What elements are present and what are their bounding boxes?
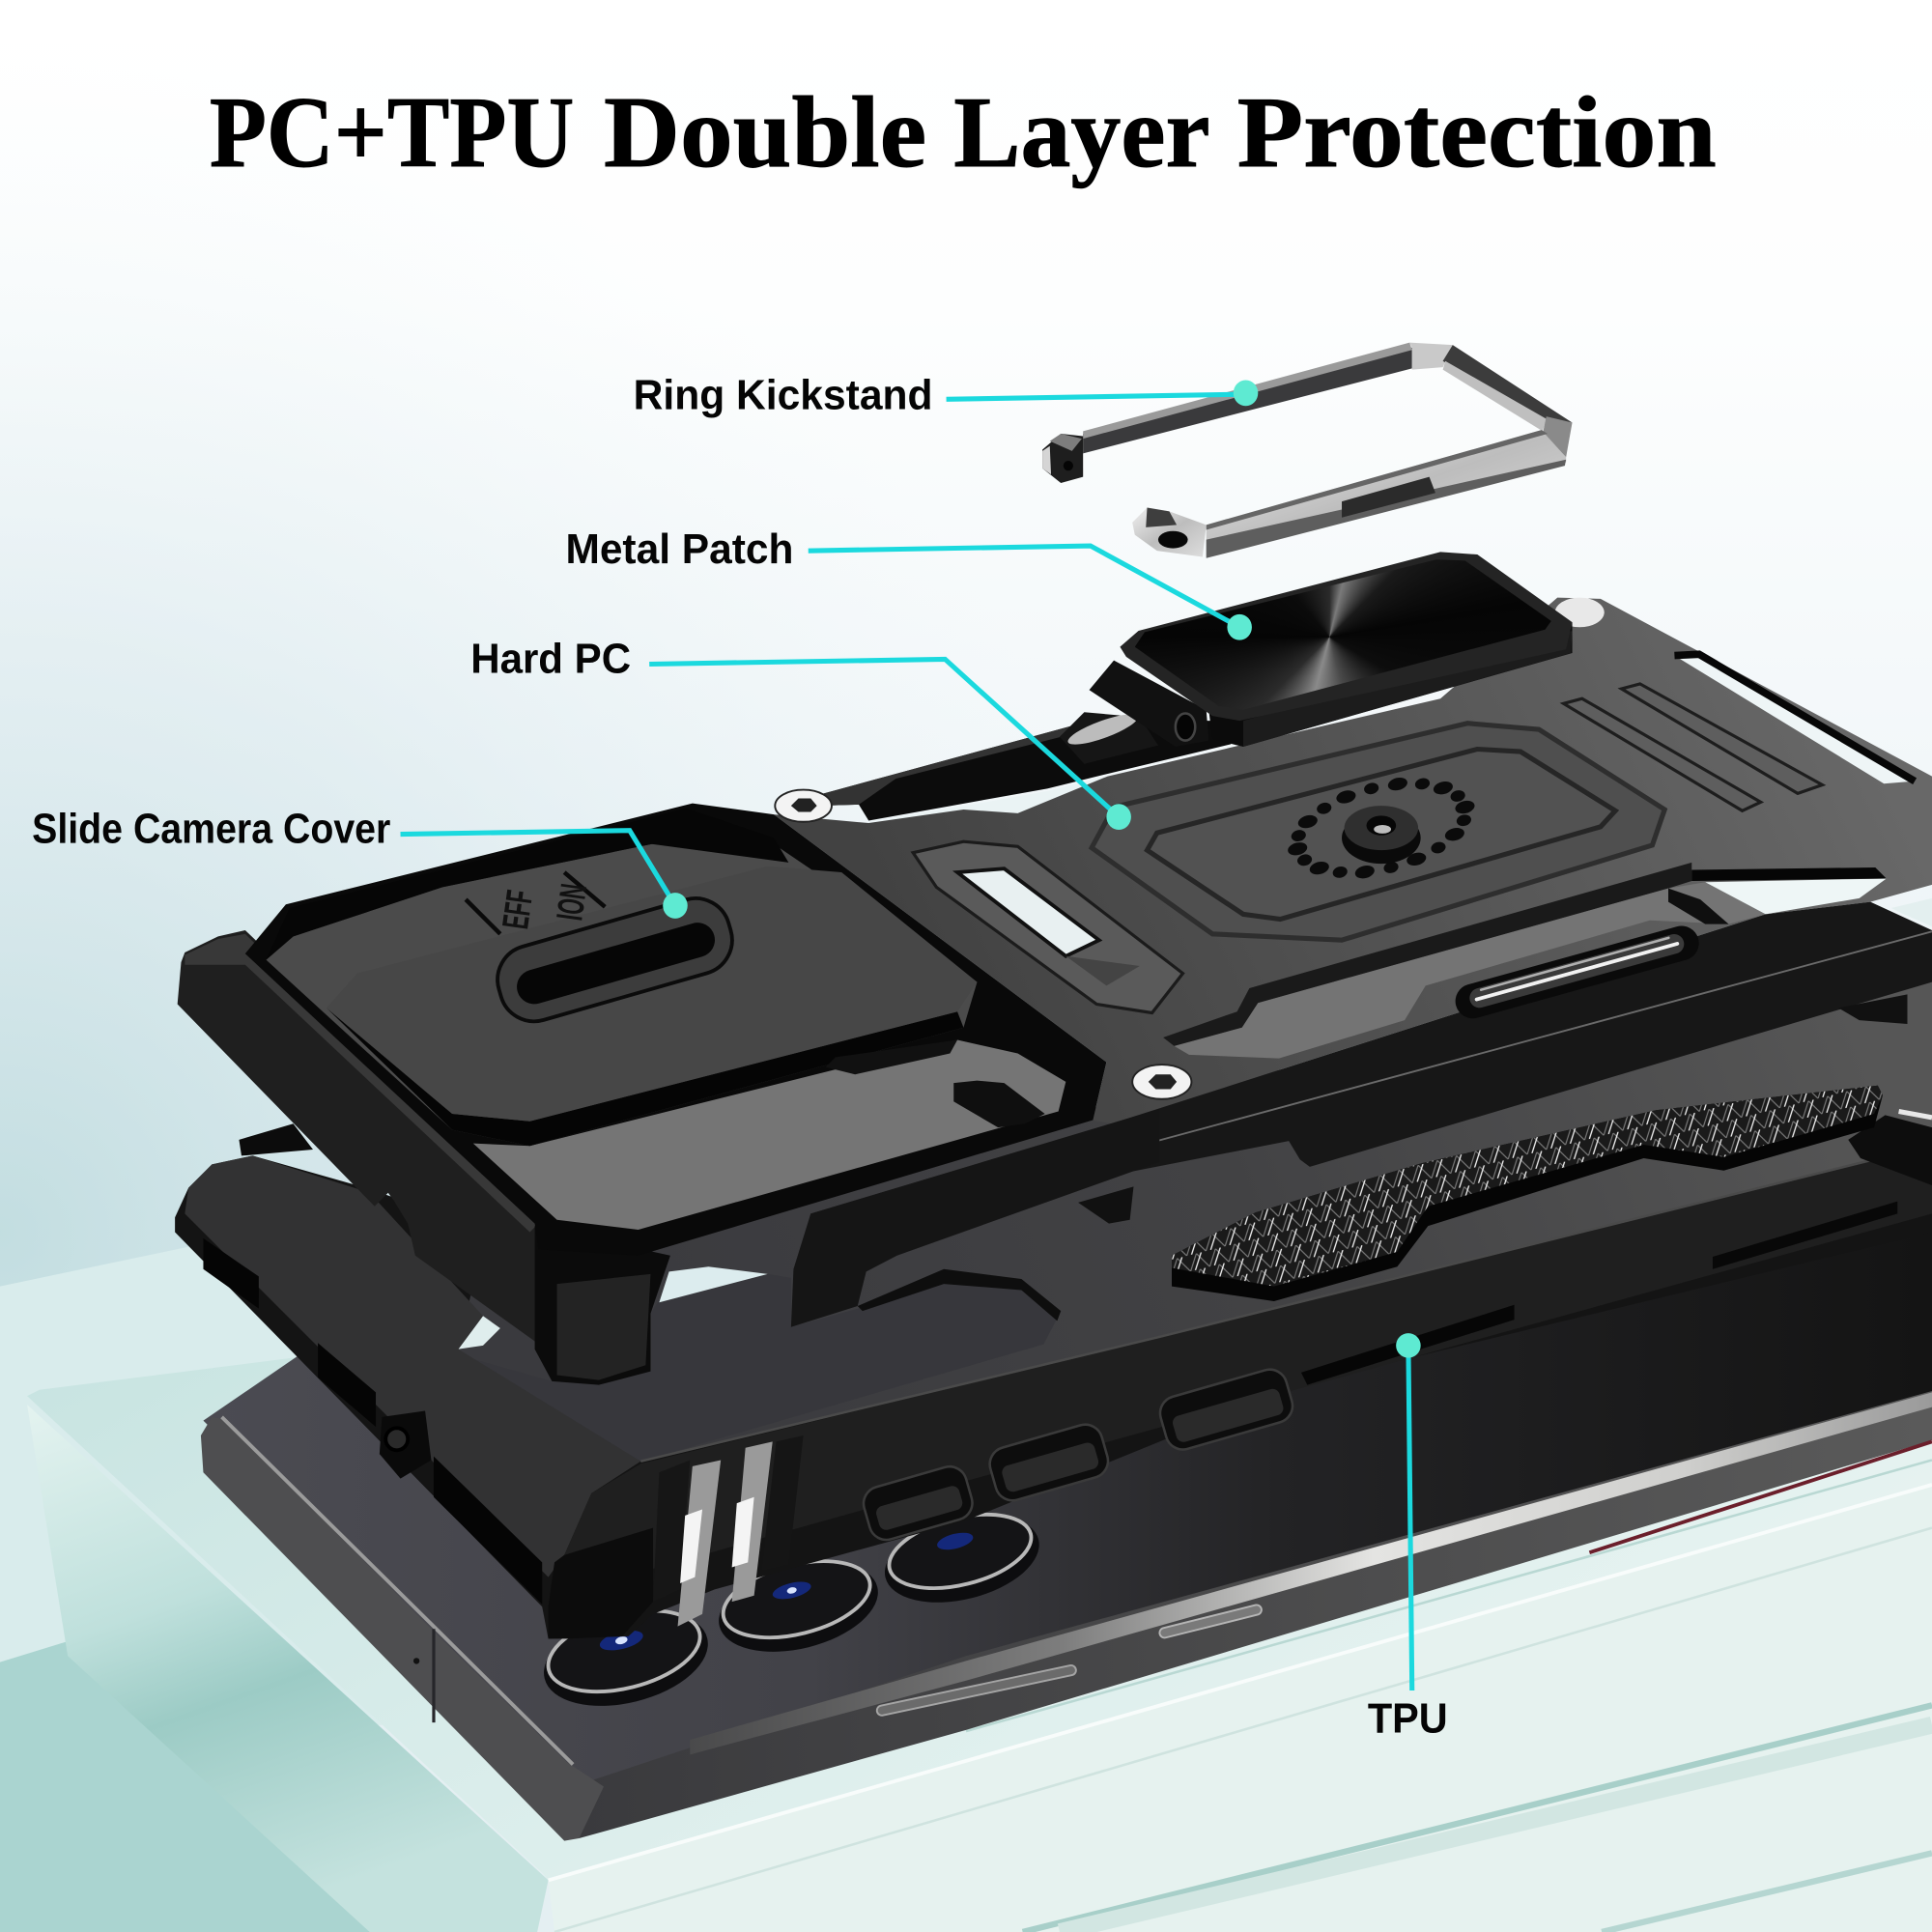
cover label bbox=[466, 872, 605, 934]
callout: TPU: TPU bbox=[1368, 1695, 1448, 1742]
display box platform bbox=[0, 1233, 1932, 1932]
ventilation bars bbox=[1564, 698, 1761, 810]
second tab bbox=[791, 1109, 1159, 1327]
power rail bbox=[793, 902, 1932, 1271]
title: Layer bbox=[953, 76, 1210, 188]
callout: Slide Camera Cover bbox=[32, 806, 688, 919]
callout: Slide Camera Cover: Slide Camera Cover bbox=[32, 806, 390, 852]
hard PC case bbox=[178, 598, 1932, 1385]
pale gaps bbox=[659, 1266, 768, 1302]
screw top bbox=[775, 790, 832, 822]
TPU long rim bbox=[564, 1146, 1932, 1589]
button 2 bbox=[985, 1420, 1112, 1504]
TPU body bbox=[175, 985, 1932, 1638]
callout: Hard PC bbox=[470, 636, 1131, 830]
mesh grip bbox=[1172, 1086, 1883, 1301]
metal patch bbox=[1090, 552, 1573, 747]
left end block bbox=[1042, 434, 1083, 483]
screw under patch bbox=[1060, 709, 1158, 764]
window ledge bbox=[858, 1269, 1061, 1321]
left rim bbox=[178, 930, 554, 1355]
box top face bbox=[27, 1233, 1932, 1880]
title: PC+TPU bbox=[210, 76, 574, 188]
camera lens 2 bbox=[709, 1547, 888, 1667]
frame highlight bbox=[690, 1392, 1932, 1754]
rear tab bbox=[239, 1123, 313, 1155]
callout: Metal Patch bbox=[565, 526, 1252, 640]
camera recess bbox=[267, 844, 977, 1146]
lower camera window bbox=[473, 1040, 1065, 1230]
tube body bbox=[774, 721, 1091, 807]
phone right frame bbox=[573, 1391, 1932, 1838]
side buttons bbox=[876, 1664, 1077, 1717]
button 1 bbox=[860, 1463, 977, 1544]
spun metal disc bbox=[1135, 559, 1551, 704]
ring mount boss bbox=[1342, 806, 1421, 864]
lower arm bbox=[1207, 430, 1566, 557]
TPU left rim top bbox=[185, 1155, 640, 1577]
camera frame outer bbox=[245, 804, 1106, 1256]
patch left hinge bbox=[1090, 661, 1208, 747]
TPU inner case bbox=[175, 936, 1932, 1638]
plate silhouette bbox=[774, 598, 1932, 1123]
corner rib stripes bbox=[653, 1435, 804, 1627]
cover label: ION bbox=[549, 881, 595, 923]
phone bbox=[201, 985, 1932, 1841]
right window slot bbox=[1674, 654, 1915, 783]
box left face bbox=[27, 1405, 549, 1932]
side slot bbox=[1301, 1305, 1515, 1385]
screw middle bbox=[1132, 1065, 1191, 1099]
upper arm bbox=[1083, 348, 1412, 453]
corner foot bbox=[535, 1226, 670, 1385]
right side bbox=[1443, 345, 1573, 423]
phone back panel bbox=[203, 985, 1932, 1789]
box front face bbox=[549, 1485, 1932, 1932]
ring mount holes bbox=[1277, 760, 1486, 896]
camera lens 3 bbox=[875, 1500, 1048, 1617]
TPU phone window bbox=[456, 1274, 1057, 1462]
pale far end bbox=[1891, 898, 1932, 926]
patch side bbox=[1208, 622, 1573, 747]
right corner bbox=[1543, 416, 1573, 457]
TPU plate bbox=[456, 936, 1932, 1462]
camera window ledge bbox=[953, 1081, 1045, 1127]
pale cut-out bbox=[1705, 878, 1887, 914]
patch top bbox=[1120, 552, 1573, 721]
cover label: EFF bbox=[495, 888, 541, 931]
rear platform bbox=[0, 1235, 739, 1725]
right end block bbox=[1132, 508, 1207, 557]
title: Protection bbox=[1237, 76, 1717, 188]
right end of TPU bbox=[1848, 1112, 1932, 1185]
corner block bbox=[549, 1528, 653, 1638]
camera lens 1 bbox=[534, 1595, 718, 1721]
red screen sliver bbox=[1589, 1441, 1932, 1552]
phone left frame bbox=[201, 1417, 604, 1841]
charging hole bbox=[380, 1410, 431, 1479]
slide camera cover bbox=[327, 867, 977, 1146]
callout: Ring Kickstand bbox=[634, 372, 1258, 418]
callout: TPU bbox=[1368, 1333, 1448, 1742]
button 3 bbox=[1156, 1366, 1296, 1454]
pale slot under tube bbox=[868, 777, 1108, 823]
raised center panel bbox=[1092, 724, 1664, 940]
chrome power button bbox=[1452, 922, 1703, 1022]
callout: Ring Kickstand: Ring Kickstand bbox=[634, 372, 933, 418]
left slot recess bbox=[913, 841, 1182, 1012]
screw right bbox=[1555, 598, 1605, 627]
lower plate grey window bbox=[1175, 882, 1766, 1059]
top black band bbox=[267, 809, 788, 960]
callout: Hard PC: Hard PC bbox=[470, 636, 631, 682]
callout: Metal Patch: Metal Patch bbox=[565, 526, 793, 573]
floor bbox=[0, 1616, 493, 1932]
lower notch bbox=[1342, 477, 1435, 518]
ring kickstand bbox=[1042, 343, 1573, 558]
top tube bbox=[774, 721, 1233, 820]
lower plate black band bbox=[1163, 863, 1691, 1046]
left cut-out slots bbox=[203, 1238, 259, 1309]
inner block bbox=[1668, 889, 1729, 924]
slide knob bbox=[490, 891, 740, 1030]
title: Double bbox=[604, 76, 926, 188]
upper corner bbox=[1409, 343, 1453, 370]
